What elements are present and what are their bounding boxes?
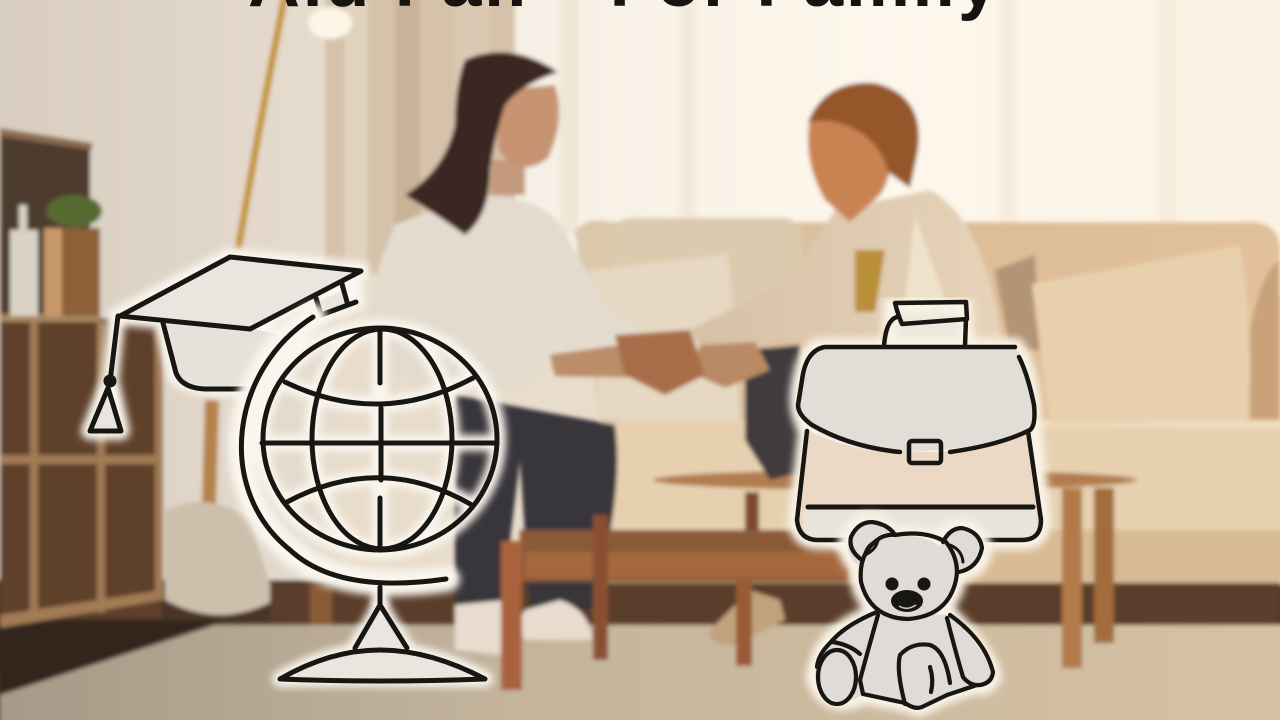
curtains [325,0,1176,275]
man [690,83,1002,645]
icon: desk globe [241,317,498,681]
front coffee table [501,515,850,690]
icon: graduation cap [90,257,361,431]
globe linework [241,317,497,681]
sofa [575,218,1280,585]
wall [0,0,340,635]
globe glow [241,317,498,605]
sofa leg [310,585,332,625]
bear halo [815,522,993,708]
base fill [280,606,485,679]
shelf unit [0,128,163,628]
bear fill [815,523,993,708]
dark floor corner [0,620,220,695]
icon: teddy bear [815,522,993,708]
window with sheer curtains [510,0,1280,295]
clasped hands [615,330,705,395]
laundry bag [165,502,275,615]
bear linework [817,522,993,708]
floor shadow under sofa [270,583,1280,625]
floor lamp [207,0,352,570]
rug [0,625,1280,720]
woman [367,52,650,655]
floor [0,580,1280,720]
icon: briefcase [797,302,1042,541]
base glow [280,606,485,679]
back table [653,470,1137,668]
